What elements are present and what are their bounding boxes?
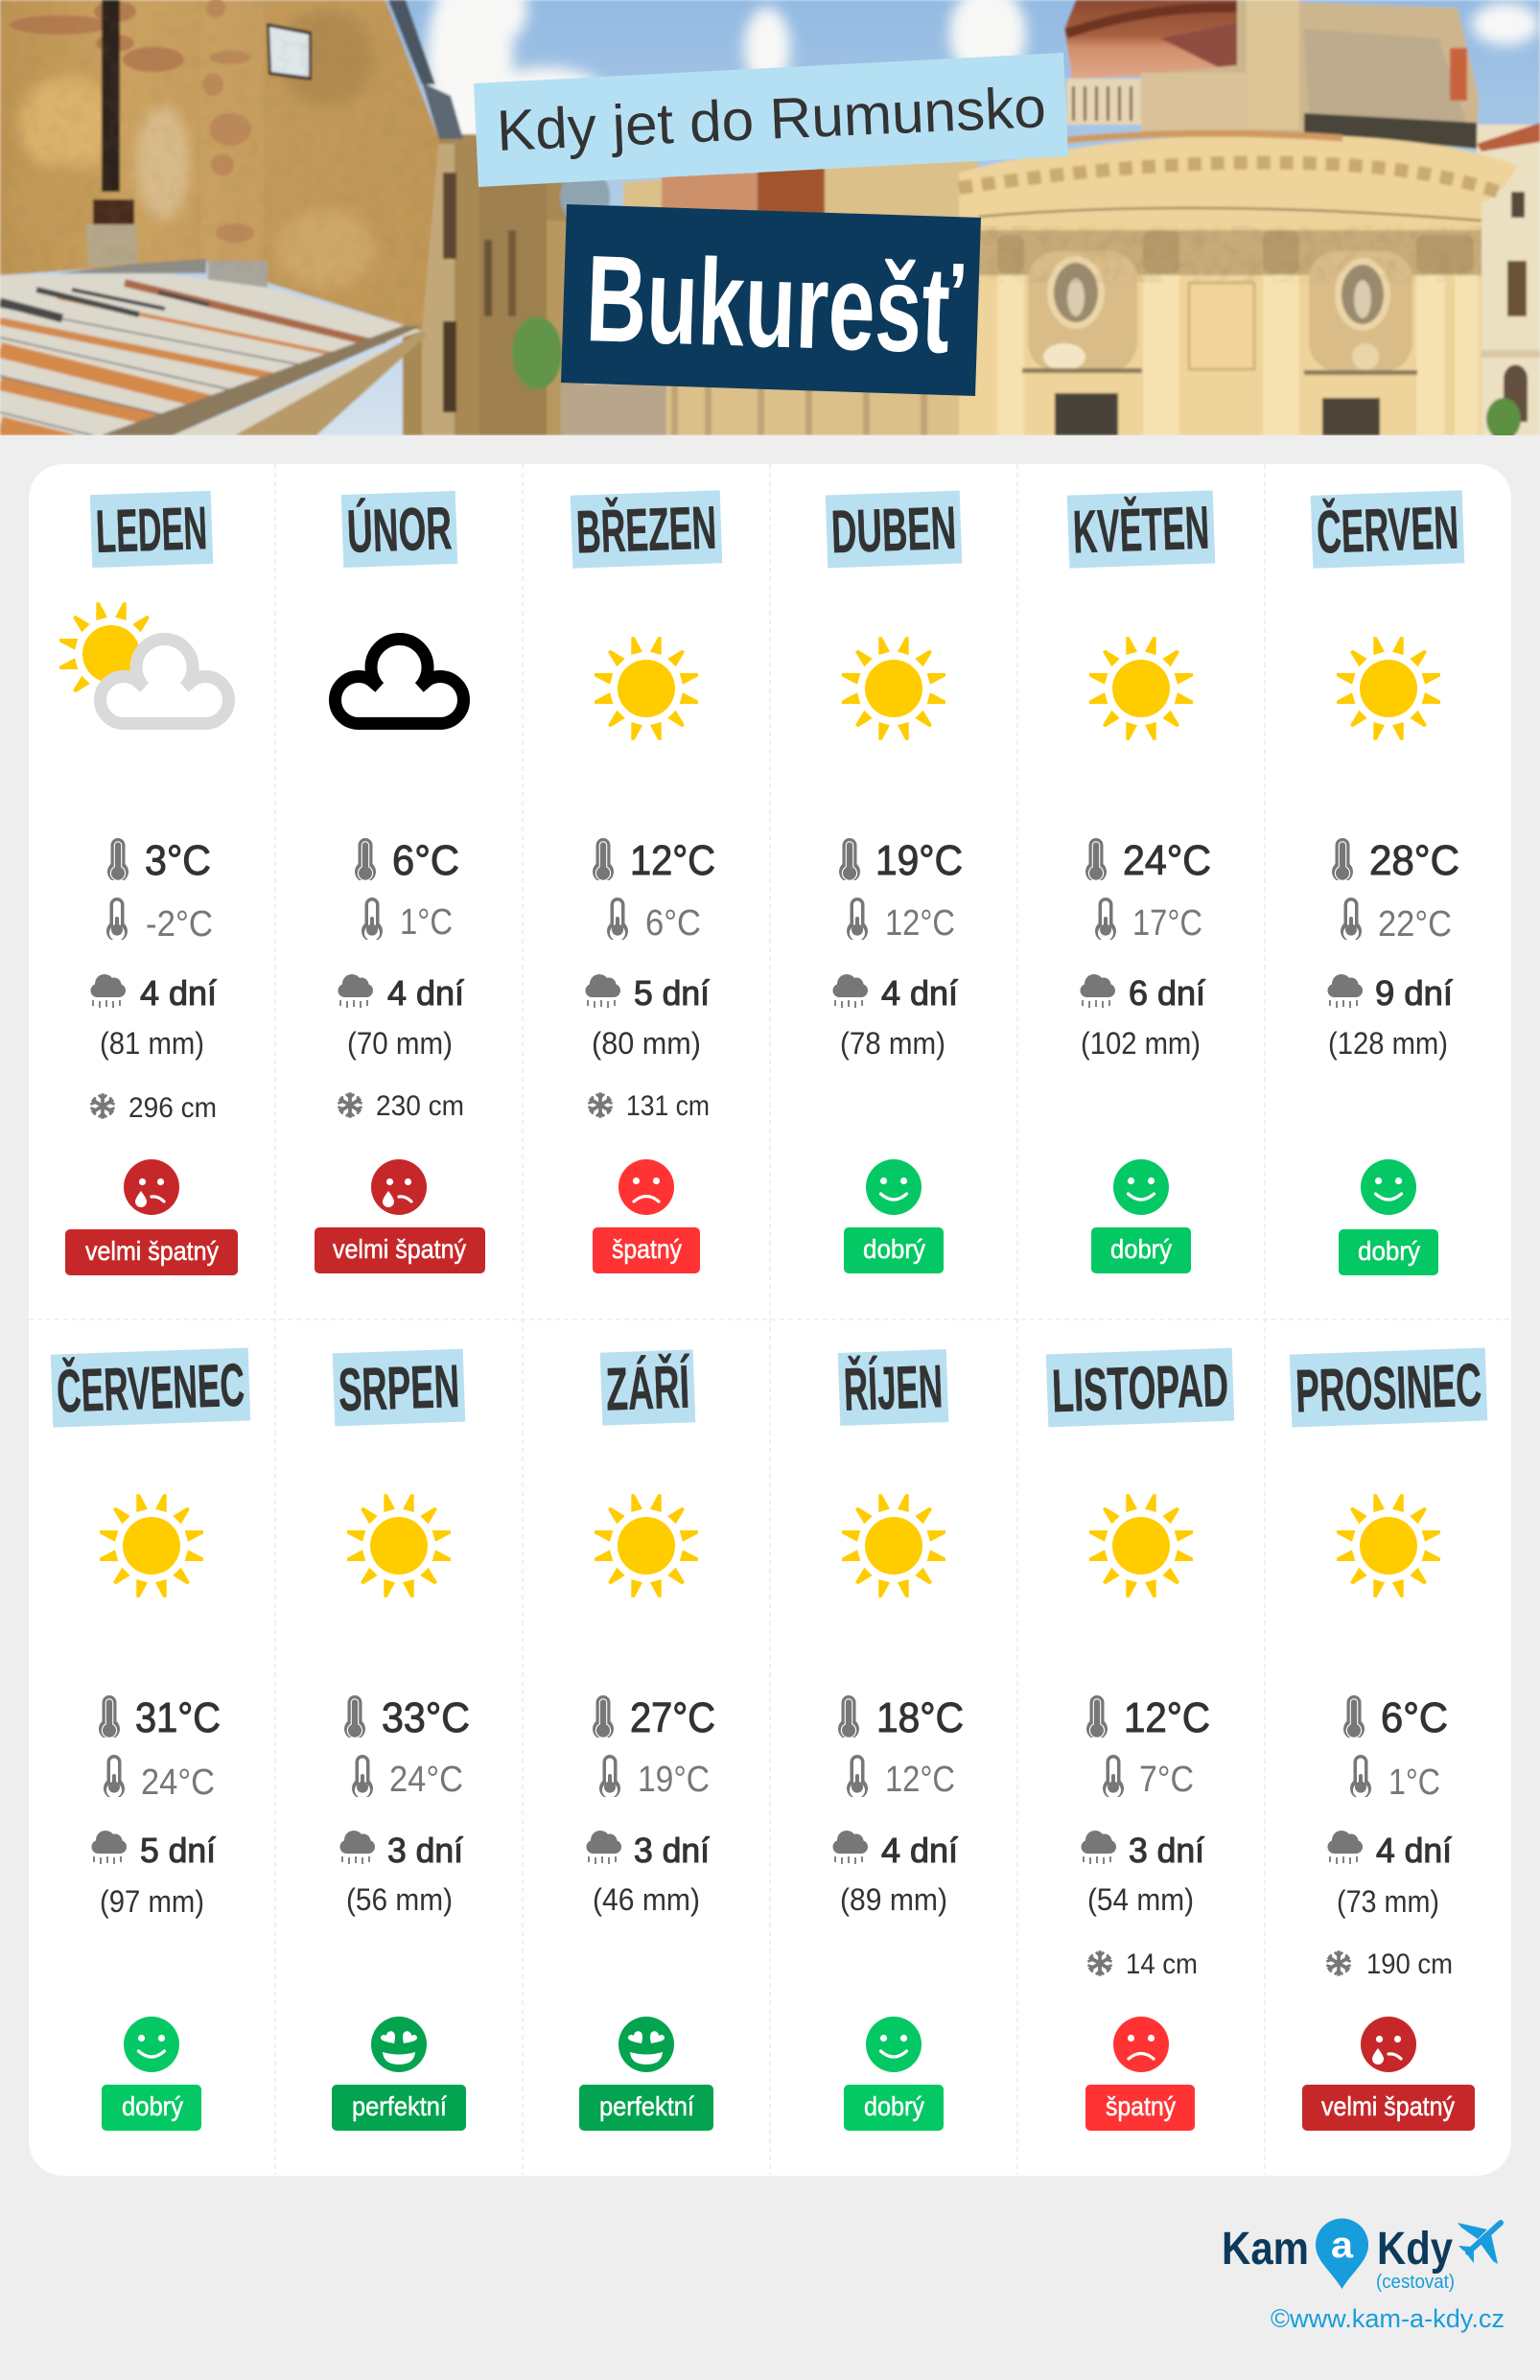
high temperature	[107, 837, 211, 884]
low temperature	[847, 898, 955, 944]
rainy days	[338, 973, 464, 1013]
logo: Kam a Kdy: Kdy	[1377, 2224, 1453, 2275]
month label	[341, 491, 457, 568]
month label	[333, 1349, 465, 1426]
right building	[1477, 125, 1540, 435]
rating face	[371, 2017, 427, 2072]
month label: LISTOPAD	[1051, 1352, 1229, 1425]
month label: DUBEN	[830, 495, 957, 566]
month label: KVĚTEN	[1072, 494, 1210, 566]
rating badge: dobrý	[122, 2091, 183, 2121]
low temperature: 17°C	[1132, 903, 1202, 944]
icon: sun	[1337, 1494, 1440, 1598]
rating badge: špatný	[1106, 2091, 1176, 2121]
header photo: Bucharest architecture	[0, 0, 1540, 451]
panel: ÚNOR	[315, 491, 485, 1273]
rating badge	[315, 1227, 485, 1273]
icon: cloud	[336, 639, 463, 723]
rating badge: dobrý	[1110, 1234, 1172, 1264]
high temperature	[593, 1694, 715, 1741]
rating face	[618, 1159, 674, 1215]
month label	[838, 1349, 948, 1426]
high temperature	[1085, 837, 1211, 884]
rainy days: 5 dní	[634, 973, 710, 1013]
high temperature: 28°C	[1369, 837, 1459, 884]
rainy days: 4 dní	[881, 973, 958, 1013]
website url: ©www.kam-a-kdy.cz	[1271, 2304, 1505, 2333]
panel: PROSINEC	[1290, 1347, 1487, 2131]
precipitation: (89 mm)	[840, 1882, 947, 1917]
high temperature: 27°C	[630, 1694, 715, 1741]
high temperature: 31°C	[135, 1694, 221, 1741]
month label: ČERVENEC	[56, 1351, 245, 1425]
rainy days: 5 dní	[140, 1831, 216, 1870]
month label	[51, 1347, 250, 1428]
high temperature	[1086, 1694, 1210, 1741]
panel: ZÁŘÍ	[579, 1349, 715, 2131]
high temperature: 12°C	[630, 837, 715, 884]
rainy days	[92, 1831, 216, 1870]
snow: 14 cm	[1126, 1948, 1198, 1980]
precipitation: (80 mm)	[592, 1026, 701, 1061]
low temperature	[106, 898, 213, 945]
icon: sun	[842, 637, 945, 740]
month label: ZÁŘÍ	[605, 1352, 691, 1423]
corrugated roof	[0, 273, 422, 435]
snow: 131 cm	[626, 1090, 710, 1122]
logo: Kam a Kdy	[1222, 2219, 1501, 2293]
rating badge	[65, 1229, 238, 1275]
distant buildings	[623, 153, 978, 435]
rainy days	[832, 973, 958, 1013]
snow: 190 cm	[1366, 1948, 1453, 1980]
low temperature	[1095, 898, 1202, 944]
low temperature: 1°C	[400, 902, 453, 943]
high temperature: 33°C	[382, 1694, 470, 1741]
high temperature	[1343, 1694, 1448, 1741]
dome	[1064, 0, 1248, 79]
rainy days: 4 dní	[1376, 1831, 1452, 1870]
rainy days	[339, 1831, 463, 1870]
precipitation: (102 mm)	[1081, 1026, 1201, 1061]
month label	[1311, 490, 1464, 569]
title strip: Kdy jet do Rumunsko: Kdy jet do Rumunsko	[496, 75, 1047, 163]
window	[267, 23, 312, 81]
rating face	[1361, 1159, 1416, 1215]
high temperature: 3°C	[145, 837, 211, 884]
rating badge	[593, 1227, 700, 1273]
low temperature: 19°C	[638, 1760, 710, 1800]
precipitation: (56 mm)	[346, 1882, 453, 1917]
rainy days: 3 dní	[1129, 1831, 1204, 1870]
high temperature: 18°C	[876, 1694, 964, 1741]
rating badge: velmi špatný	[1321, 2091, 1455, 2121]
icon: sun behind cloud	[59, 602, 228, 723]
icon: sun	[100, 1494, 203, 1598]
title strip: Bukurešť: Bukurešť	[584, 230, 965, 380]
low temperature: 6°C	[645, 903, 701, 944]
high temperature	[344, 1694, 470, 1741]
rating badge: velmi špatný	[85, 1236, 219, 1266]
panel: SRPEN	[332, 1349, 470, 2131]
rating badge	[1302, 2085, 1475, 2131]
rating face	[124, 2017, 179, 2072]
rating badge: perfektní	[352, 2091, 447, 2121]
icon: sun	[595, 637, 698, 740]
month label	[571, 490, 722, 569]
rainy days	[1327, 973, 1453, 1013]
rating badge	[102, 2085, 201, 2131]
drain pipe	[102, 0, 120, 192]
icon: location pin	[1316, 2219, 1368, 2289]
low temperature	[1350, 1755, 1440, 1803]
precipitation: (73 mm)	[1337, 1884, 1439, 1919]
rainy days	[1327, 1831, 1452, 1870]
snow	[90, 1092, 217, 1124]
rating face	[371, 1159, 427, 1215]
high temperature: 24°C	[1123, 837, 1211, 884]
title strip: Kdy jet do Rumunsko	[474, 53, 1068, 187]
panel: months table	[29, 464, 1511, 2176]
snow: 296 cm	[128, 1092, 217, 1124]
rating badge: dobrý	[863, 1234, 925, 1264]
rating face	[1113, 2017, 1169, 2072]
precipitation: (46 mm)	[593, 1882, 700, 1917]
precipitation: (81 mm)	[100, 1026, 204, 1061]
low temperature: 24°C	[389, 1760, 463, 1800]
panel: LEDEN	[59, 491, 238, 1275]
month label: BŘEZEN	[575, 493, 717, 567]
rainy days	[1082, 1831, 1204, 1870]
rating badge	[1339, 1229, 1438, 1275]
icon: sun	[842, 1494, 945, 1598]
high temperature	[839, 837, 963, 884]
rotunda	[959, 134, 1517, 435]
rating badge	[1091, 1227, 1191, 1273]
snow	[1326, 1948, 1453, 1980]
month label	[600, 1349, 695, 1426]
precipitation: (78 mm)	[840, 1026, 945, 1061]
precipitation: (128 mm)	[1328, 1026, 1448, 1061]
rating badge: perfektní	[599, 2091, 694, 2121]
high temperature: 6°C	[1381, 1694, 1448, 1741]
low temperature: 24°C	[141, 1762, 215, 1803]
rating badge: špatný	[612, 1234, 682, 1264]
rainy days: 3 dní	[387, 1831, 463, 1870]
precipitation: (54 mm)	[1087, 1882, 1194, 1917]
icon: sun	[595, 1494, 698, 1598]
high temperature	[355, 837, 459, 884]
rating face	[866, 2017, 922, 2072]
low temperature	[352, 1755, 463, 1800]
street facade	[403, 134, 585, 435]
icon: sun	[347, 1494, 451, 1598]
low temperature	[104, 1755, 215, 1803]
panel: ŘÍJEN	[832, 1349, 964, 2131]
low temperature: 12°C	[885, 1760, 955, 1800]
rainy days	[585, 973, 710, 1013]
rating face	[1361, 2017, 1416, 2072]
rating badge	[579, 2085, 713, 2131]
low temperature: 12°C	[885, 903, 955, 944]
low temperature: 7°C	[1139, 1760, 1194, 1800]
low temperature	[847, 1755, 955, 1800]
icon: sun	[1089, 1494, 1193, 1598]
logo: Kam a Kdy: Kam	[1222, 2224, 1309, 2275]
icon: sun	[1089, 637, 1193, 740]
rainy days: 6 dní	[1129, 973, 1205, 1013]
rainy days	[832, 1831, 958, 1870]
panel: KVĚTEN	[1067, 490, 1215, 1273]
rainy days: 3 dní	[634, 1831, 710, 1870]
rainy days	[90, 973, 217, 1013]
icon: sun	[1337, 637, 1440, 740]
low temperature: 22°C	[1378, 904, 1452, 945]
snow	[338, 1090, 464, 1122]
logo: Kam a Kdy: (cestovat)	[1376, 2272, 1455, 2293]
high temperature	[593, 837, 715, 884]
month label	[826, 491, 962, 568]
snow	[588, 1090, 710, 1122]
month label: ÚNOR	[346, 495, 453, 566]
panel: LISTOPAD	[1046, 1348, 1234, 2131]
rating face	[124, 1159, 179, 1215]
month label: ŘÍJEN	[843, 1352, 944, 1424]
rainy days: 9 dní	[1375, 973, 1453, 1013]
rainy days: 4 dní	[881, 1831, 958, 1870]
month label	[1067, 490, 1215, 569]
title strip: Bukurešť	[561, 204, 981, 396]
low temperature	[1341, 898, 1452, 945]
logo: Kam a Kdy: a	[1331, 2226, 1354, 2266]
low temperature: -2°C	[146, 904, 213, 945]
snow: 230 cm	[376, 1090, 464, 1122]
high temperature	[99, 1694, 221, 1741]
month label	[90, 491, 213, 568]
icon: plane	[1458, 2223, 1501, 2264]
high temperature: 12°C	[1124, 1694, 1210, 1741]
high temperature	[838, 1694, 964, 1741]
month label: LEDEN	[95, 495, 208, 566]
precipitation: (97 mm)	[100, 1884, 204, 1919]
low temperature	[362, 898, 453, 943]
rainy days	[587, 1831, 710, 1870]
rainy days: 4 dní	[140, 973, 217, 1013]
rating badge	[1085, 2085, 1195, 2131]
high temperature: 6°C	[392, 837, 459, 884]
high temperature: 19°C	[875, 837, 963, 884]
low temperature	[607, 898, 701, 944]
rating badge	[844, 1227, 944, 1273]
low temperature	[1103, 1755, 1194, 1800]
month label: SRPEN	[338, 1353, 460, 1424]
precipitation: (70 mm)	[347, 1026, 453, 1061]
rating face	[618, 2017, 674, 2072]
rating badge: velmi špatný	[333, 1234, 466, 1264]
rating badge	[332, 2085, 466, 2131]
panel: ČERVENEC	[51, 1347, 250, 2131]
panel: DUBEN	[826, 491, 963, 1273]
low temperature: 1°C	[1388, 1762, 1440, 1803]
tower drum	[1141, 0, 1479, 149]
high temperature	[1332, 837, 1459, 884]
rainy days: 4 dní	[387, 973, 464, 1013]
month label	[1046, 1348, 1234, 1427]
low temperature	[599, 1755, 710, 1800]
panel: ČERVEN	[1311, 490, 1464, 1275]
rating badge	[844, 2085, 944, 2131]
panel: BŘEZEN	[571, 490, 722, 1273]
roof gutter	[388, 0, 435, 84]
rainy days	[1080, 973, 1205, 1013]
rating face	[866, 1159, 922, 1215]
rating face	[1113, 1159, 1169, 1215]
snow	[1087, 1948, 1198, 1980]
rating badge: dobrý	[1358, 1236, 1420, 1266]
left wall	[0, 0, 439, 331]
rating badge: dobrý	[864, 2091, 924, 2121]
